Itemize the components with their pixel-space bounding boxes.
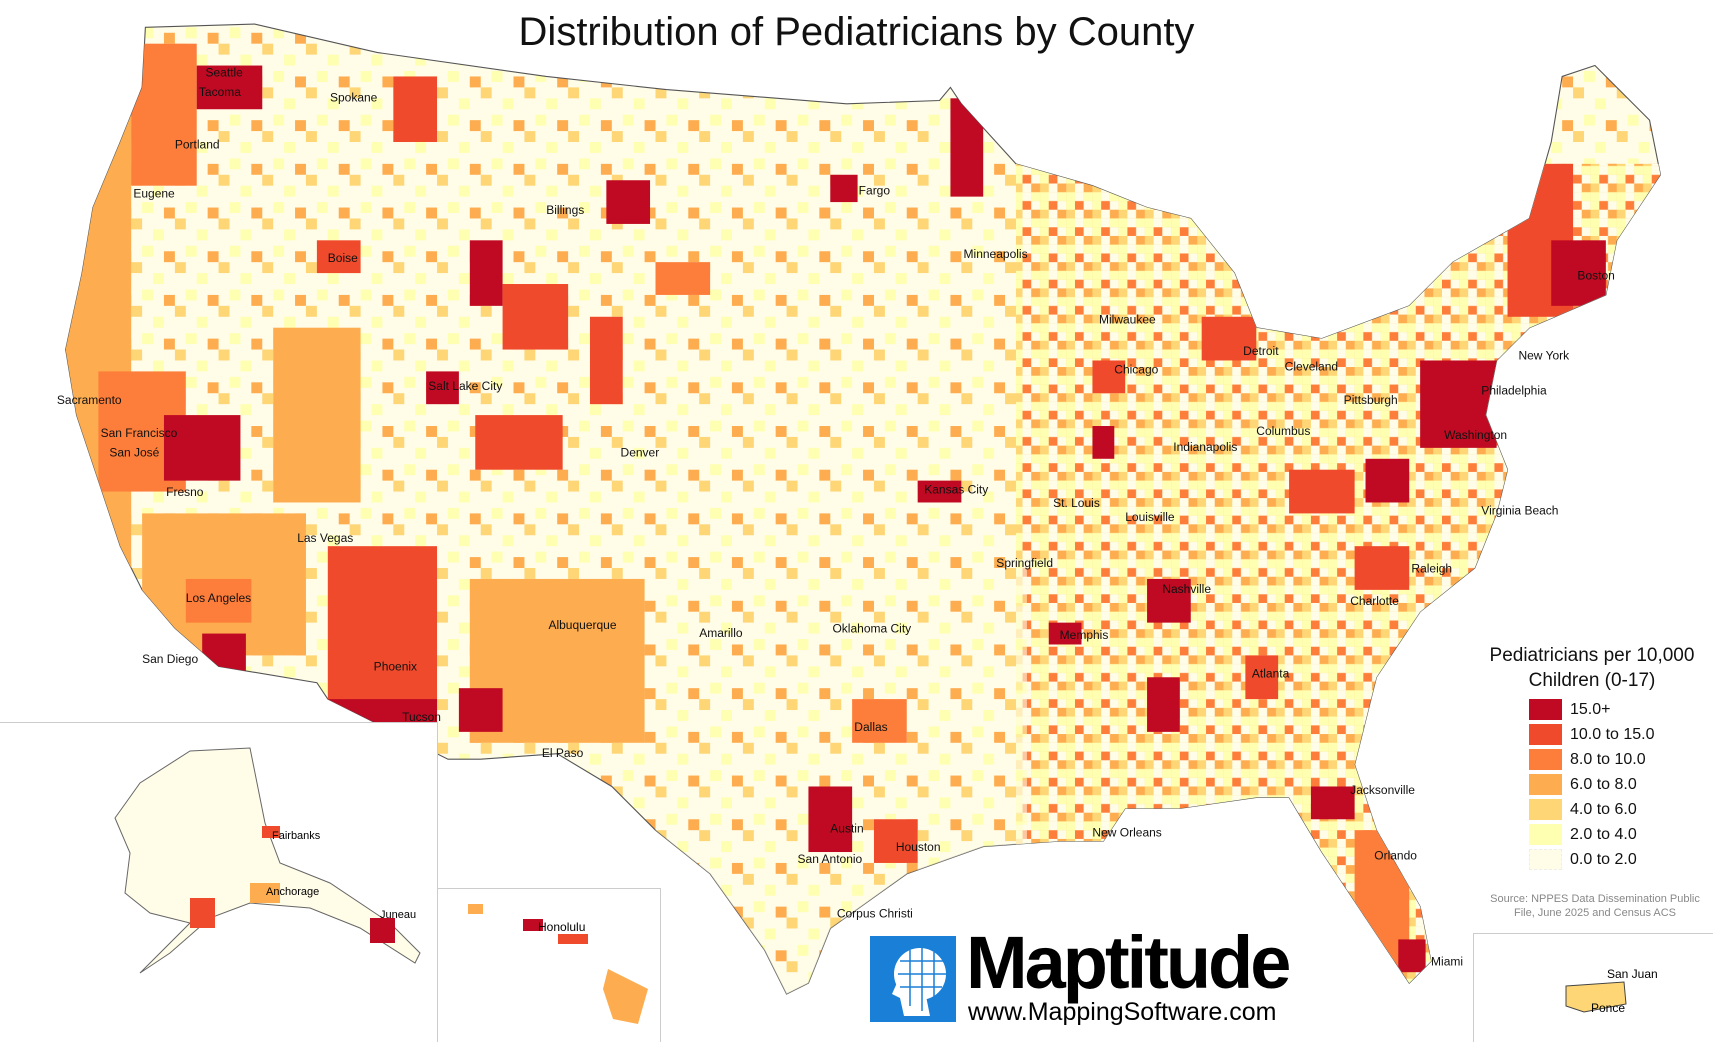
city labels: New York — [1518, 348, 1570, 362]
inset: Alaska: Fairbanks — [272, 830, 321, 842]
city labels: San Antonio — [798, 852, 863, 866]
inset: Alaska — [0, 722, 438, 1042]
city labels: Milwaukee — [1099, 312, 1156, 326]
city labels: Billings — [546, 203, 584, 217]
city labels: Boise — [328, 251, 358, 265]
city labels: St. Louis — [1053, 496, 1100, 510]
city labels: Houston — [896, 840, 941, 854]
city labels — [57, 65, 1615, 969]
city labels: Corpus Christi — [837, 907, 913, 921]
city labels: Tacoma — [199, 85, 241, 99]
city labels: Eugene — [133, 187, 175, 201]
inset: Hawaii: Honolulu — [538, 920, 585, 934]
city labels: Nashville — [1162, 582, 1211, 596]
legend title: Pediatricians per 10,000 — [1490, 645, 1694, 666]
city labels: San Francisco — [101, 426, 178, 440]
legend items: 10.0 to 15.0 — [1570, 726, 1655, 743]
inset: Hawaii — [438, 888, 661, 1042]
city labels: Columbus — [1256, 424, 1310, 438]
city labels: Kansas City — [924, 483, 988, 497]
legend items: 0.0 to 2.0 — [1570, 851, 1637, 868]
city labels: Tucson — [402, 710, 441, 724]
inset: Puerto Rico: San Juan — [1607, 967, 1658, 981]
title: Distribution of Pediatricians by County — [519, 10, 1194, 54]
inset: Alaska: Anchorage — [266, 886, 319, 898]
city labels: Virginia Beach — [1481, 503, 1558, 517]
city labels: Dallas — [854, 720, 888, 734]
legend title — [1490, 645, 1694, 691]
source note — [1490, 893, 1700, 919]
city labels: Portland — [175, 138, 220, 152]
city labels: Fargo — [859, 183, 890, 197]
brand name: Maptitude — [966, 921, 1288, 1004]
legend title: Children (0-17) — [1529, 670, 1655, 691]
inset: Puerto Rico: Ponce — [1591, 1001, 1625, 1015]
city labels: Oklahoma City — [832, 621, 911, 635]
source note: File, June 2025 and Census ACS — [1514, 907, 1676, 919]
city labels: Jacksonville — [1350, 783, 1415, 797]
city labels: Austin — [830, 821, 864, 835]
city labels: Chicago — [1114, 363, 1159, 377]
city labels: Charlotte — [1350, 594, 1399, 608]
city labels: Fresno — [166, 485, 204, 499]
city labels: Cleveland — [1285, 359, 1338, 373]
city labels: Seattle — [205, 65, 243, 79]
url: www.MappingSoftware.com — [968, 998, 1276, 1026]
city labels: Orlando — [1374, 849, 1417, 863]
city labels: Detroit — [1243, 344, 1279, 358]
legend items: 6.0 to 8.0 — [1570, 776, 1637, 793]
legend items: 2.0 to 4.0 — [1570, 826, 1637, 843]
city labels: New Orleans — [1092, 826, 1162, 840]
city labels: Salt Lake City — [428, 379, 502, 393]
city labels: Sacramento — [57, 393, 122, 407]
city labels: Albuquerque — [548, 618, 617, 632]
logo — [870, 921, 1289, 1026]
inset: Puerto Rico — [1473, 933, 1713, 1042]
legend items: 8.0 to 10.0 — [1570, 751, 1646, 768]
city labels: El Paso — [542, 746, 584, 760]
city labels: San José — [109, 446, 160, 460]
city labels: Denver — [621, 446, 659, 460]
city labels: Spokane — [330, 91, 378, 105]
city labels: Washington — [1444, 428, 1507, 442]
city labels: Springfield — [996, 556, 1053, 570]
city labels: Raleigh — [1411, 561, 1452, 575]
inset: Alaska: Juneau — [380, 909, 416, 921]
city labels: Louisville — [1125, 510, 1175, 524]
city labels: Miami — [1431, 955, 1463, 969]
city labels: Atlanta — [1252, 666, 1290, 680]
city labels: Memphis — [1060, 628, 1108, 642]
city labels: San Diego — [142, 652, 198, 666]
city labels: Phoenix — [374, 660, 417, 674]
legend items: 15.0+ — [1570, 701, 1610, 718]
city labels: Indianapolis — [1173, 440, 1237, 454]
legend items: 4.0 to 6.0 — [1570, 801, 1637, 818]
city labels: Boston — [1577, 269, 1615, 283]
city labels: Las Vegas — [297, 531, 353, 545]
city labels: Amarillo — [699, 626, 743, 640]
city labels: Philadelphia — [1481, 383, 1547, 397]
legend items — [1529, 699, 1655, 870]
source note: Source: NPPES Data Dissemination Public — [1490, 893, 1700, 905]
city labels: Minneapolis — [964, 247, 1028, 261]
icon: head globe — [870, 936, 956, 1022]
city labels: Pittsburgh — [1344, 393, 1398, 407]
city labels: Los Angeles — [186, 591, 251, 605]
legend — [1490, 645, 1694, 870]
